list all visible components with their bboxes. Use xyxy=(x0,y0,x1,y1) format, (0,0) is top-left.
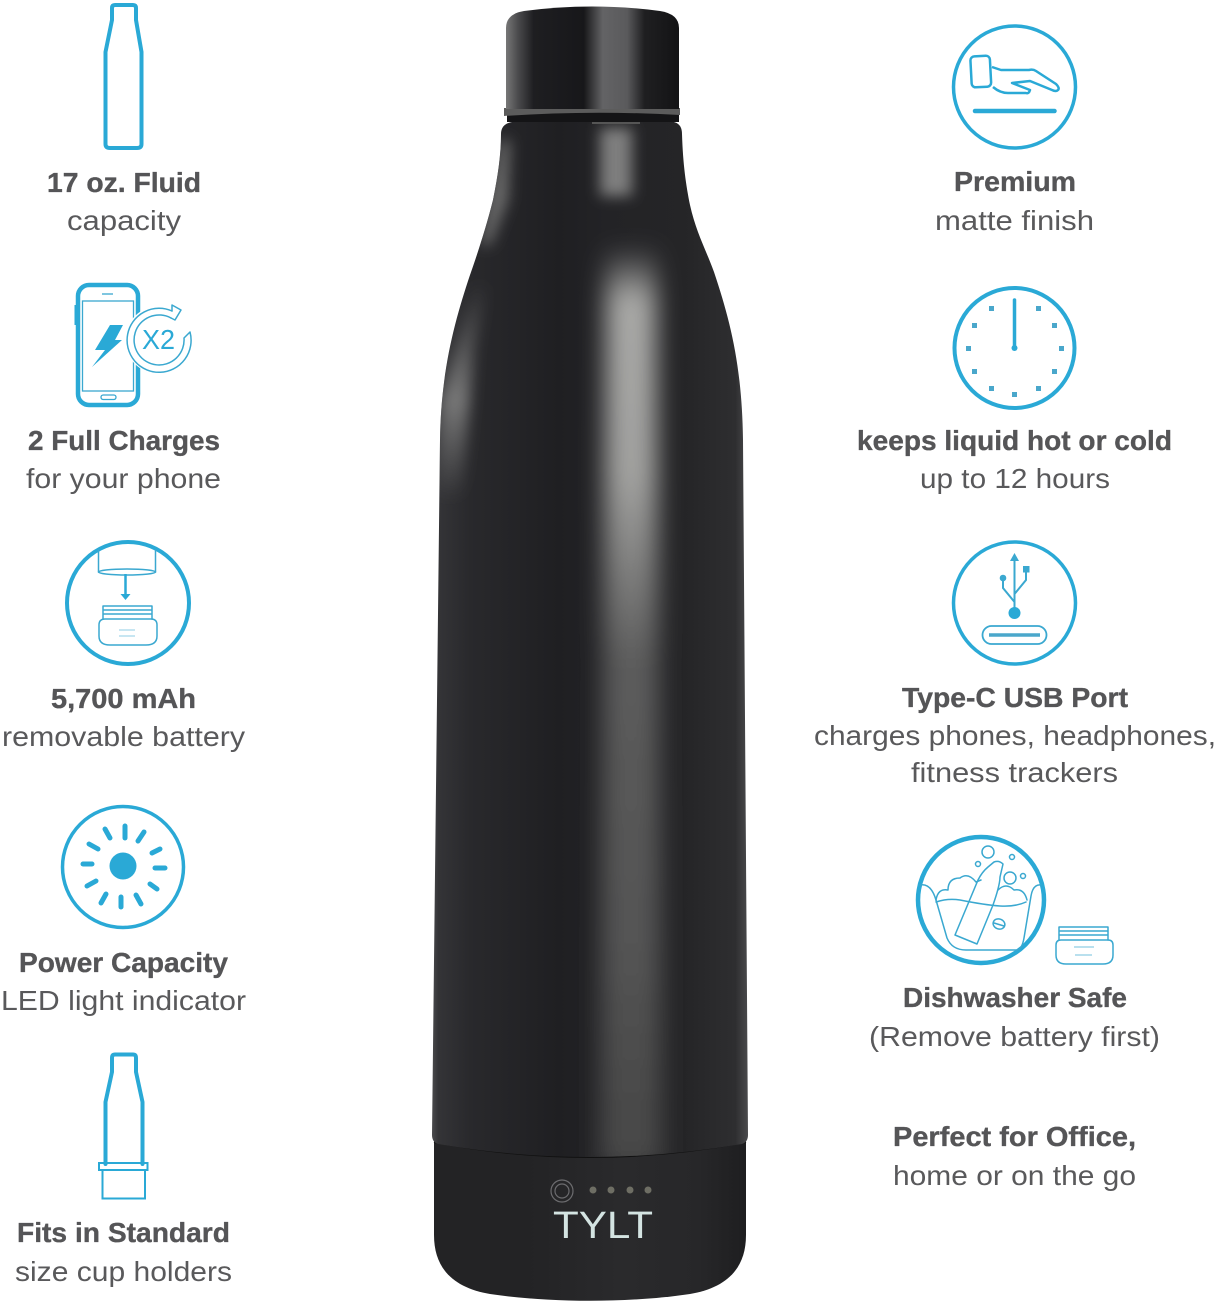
feature: 5,700 mAh battery xyxy=(2,542,245,752)
icon: bottle in wash basin xyxy=(918,837,1044,963)
bottle cap xyxy=(506,6,679,109)
heading: 17 oz. Fluid xyxy=(47,167,201,198)
description: LED light indicator xyxy=(1,985,246,1016)
icon: removable battery xyxy=(67,542,189,664)
icon: LED light xyxy=(62,806,184,928)
icon: bottle outline xyxy=(106,5,142,148)
heading: Fits in Standard xyxy=(17,1217,230,1248)
product photo: black TYLT bottle xyxy=(432,6,748,1301)
icon: bottle in cup holder xyxy=(99,1054,148,1198)
icon: clock xyxy=(954,288,1074,408)
power button icon xyxy=(551,1180,573,1202)
feature: dishwasher safe xyxy=(869,837,1160,1052)
feature: keeps liquid hot or cold xyxy=(857,288,1172,494)
description line 2: fitness trackers xyxy=(911,757,1118,788)
icon: removable battery xyxy=(1056,927,1113,964)
description: size cup holders xyxy=(15,1256,232,1287)
feature: type-c USB port xyxy=(814,542,1216,788)
LED indicator dots xyxy=(590,1186,652,1194)
description: capacity xyxy=(67,205,181,236)
heading: 2 Full Charges xyxy=(28,425,220,456)
bottle body xyxy=(432,122,748,1170)
heading: Type-C USB Port xyxy=(902,682,1128,713)
heading: Perfect for Office, xyxy=(893,1121,1136,1152)
x2 label: X2 xyxy=(142,324,175,355)
description: removable battery xyxy=(2,721,245,752)
brand logo: TYLT: TYLT xyxy=(553,1205,653,1247)
description: home or on the go xyxy=(893,1160,1136,1191)
description line 1: charges phones, headphones, xyxy=(814,720,1216,751)
description: for your phone xyxy=(26,463,221,494)
heading: Power Capacity xyxy=(19,947,228,978)
description: (Remove battery first) xyxy=(869,1021,1160,1052)
icon: USB symbol and port xyxy=(954,542,1076,664)
description: up to 12 hours xyxy=(920,463,1110,494)
icon: hand on surface xyxy=(954,26,1076,148)
icon: phone with lightning bolt and x2 xyxy=(76,285,193,405)
bottle battery base xyxy=(434,1135,746,1301)
heading: 5,700 mAh xyxy=(51,683,196,714)
feature: 2 full charges xyxy=(26,285,221,494)
feature: premium matte finish xyxy=(935,26,1094,236)
heading: Premium xyxy=(954,166,1076,197)
bottle neck ring xyxy=(504,108,680,123)
description: matte finish xyxy=(935,205,1094,236)
feature: perfect for office xyxy=(893,1121,1136,1191)
feature: fits standard cup holders xyxy=(15,1054,232,1287)
feature: 17 oz fluid capacity xyxy=(47,5,201,236)
heading: keeps liquid hot or cold xyxy=(857,425,1172,456)
feature: power capacity LED xyxy=(1,806,246,1016)
heading: Dishwasher Safe xyxy=(903,982,1127,1013)
